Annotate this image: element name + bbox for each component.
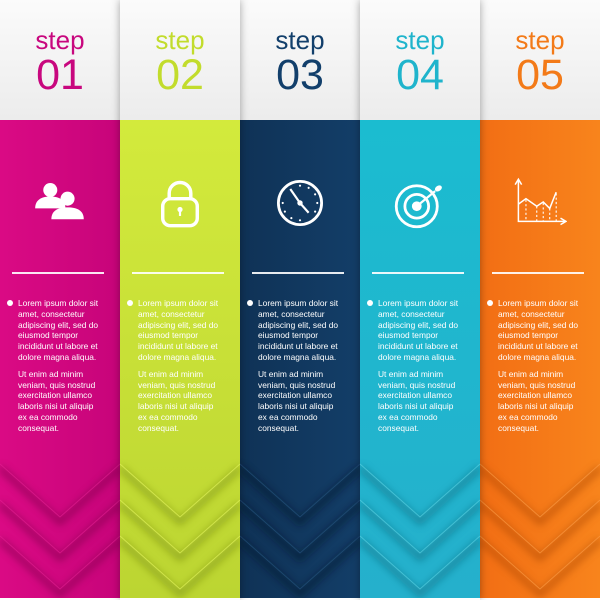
header 02: 02 (156, 51, 204, 99)
header 04: 04 (396, 51, 444, 99)
chevrons 03 (240, 464, 360, 598)
header 01: step (35, 25, 85, 55)
text 03: Lorem ipsum dolor sit amet, consectetur adipiscing elit, sed do eiusmod tempor incididunt ut labore et dolore magna aliqua. (258, 298, 338, 362)
text 02: Ut enim ad minim veniam, quis nostrud exercitation ullamco laboris nisi ut aliquip ex ea commodo consequat. (138, 369, 215, 433)
divider (132, 272, 224, 274)
text 01: Lorem ipsum dolor sit amet, consectetur adipiscing elit, sed do eiusmod tempor incididunt ut labore et dolore magna aliqua. (18, 298, 98, 362)
body 03 (240, 120, 360, 598)
text 05 (487, 298, 578, 433)
text 01: Ut enim ad minim veniam, quis nostrud exercitation ullamco laboris nisi ut aliquip ex ea commodo consequat. (18, 369, 95, 433)
panel: step 01 (0, 25, 120, 598)
chevrons 02 (120, 464, 240, 598)
header 05: 05 (516, 51, 564, 99)
text 03 (247, 298, 338, 433)
divider (492, 272, 584, 274)
text 05: Ut enim ad minim veniam, quis nostrud exercitation ullamco laboris nisi ut aliquip ex ea commodo consequat. (498, 369, 575, 433)
chevrons 04 (360, 464, 480, 598)
text 02 (127, 298, 218, 433)
panel: step 02 (120, 0, 240, 600)
header 04 (360, 0, 480, 120)
body 02 (120, 120, 240, 598)
text 04 (367, 298, 458, 433)
header 05 (480, 0, 600, 120)
divider (12, 272, 104, 274)
text 04: Ut enim ad minim veniam, quis nostrud exercitation ullamco laboris nisi ut aliquip ex ea commodo consequat. (378, 369, 455, 433)
panel: step 03 (240, 25, 360, 598)
header 01: 01 (36, 51, 84, 99)
icon: people (35, 183, 84, 220)
chevrons 05 (480, 464, 600, 598)
text 05: Lorem ipsum dolor sit amet, consectetur adipiscing elit, sed do eiusmod tempor incididunt ut labore et dolore magna aliqua. (498, 298, 578, 362)
icon: chart (514, 178, 567, 226)
body 01 (0, 120, 120, 598)
header 05: step (515, 25, 565, 55)
text 04: Lorem ipsum dolor sit amet, consectetur adipiscing elit, sed do eiusmod tempor incididunt ut labore et dolore magna aliqua. (378, 298, 458, 362)
panel: step 04 (360, 0, 480, 600)
header 02: step (155, 25, 205, 55)
chevrons 01 (0, 464, 120, 598)
body 04 (360, 120, 480, 598)
icon: target (394, 184, 442, 228)
divider (252, 272, 344, 274)
divider (372, 272, 464, 274)
icon: padlock (161, 180, 199, 228)
body 05 (480, 120, 600, 598)
header 03: 03 (276, 51, 324, 99)
header 02 (120, 0, 240, 120)
text 03: Ut enim ad minim veniam, quis nostrud exercitation ullamco laboris nisi ut aliquip ex ea commodo consequat. (258, 369, 335, 433)
header 04: step (395, 25, 445, 55)
header 03 (240, 0, 360, 120)
header 01 (0, 0, 120, 120)
panel: step 05 (480, 25, 600, 598)
header 03: step (275, 25, 325, 55)
text 02: Lorem ipsum dolor sit amet, consectetur adipiscing elit, sed do eiusmod tempor incididunt ut labore et dolore magna aliqua. (138, 298, 218, 362)
text 01 (7, 298, 98, 433)
icon: clock (277, 180, 323, 226)
